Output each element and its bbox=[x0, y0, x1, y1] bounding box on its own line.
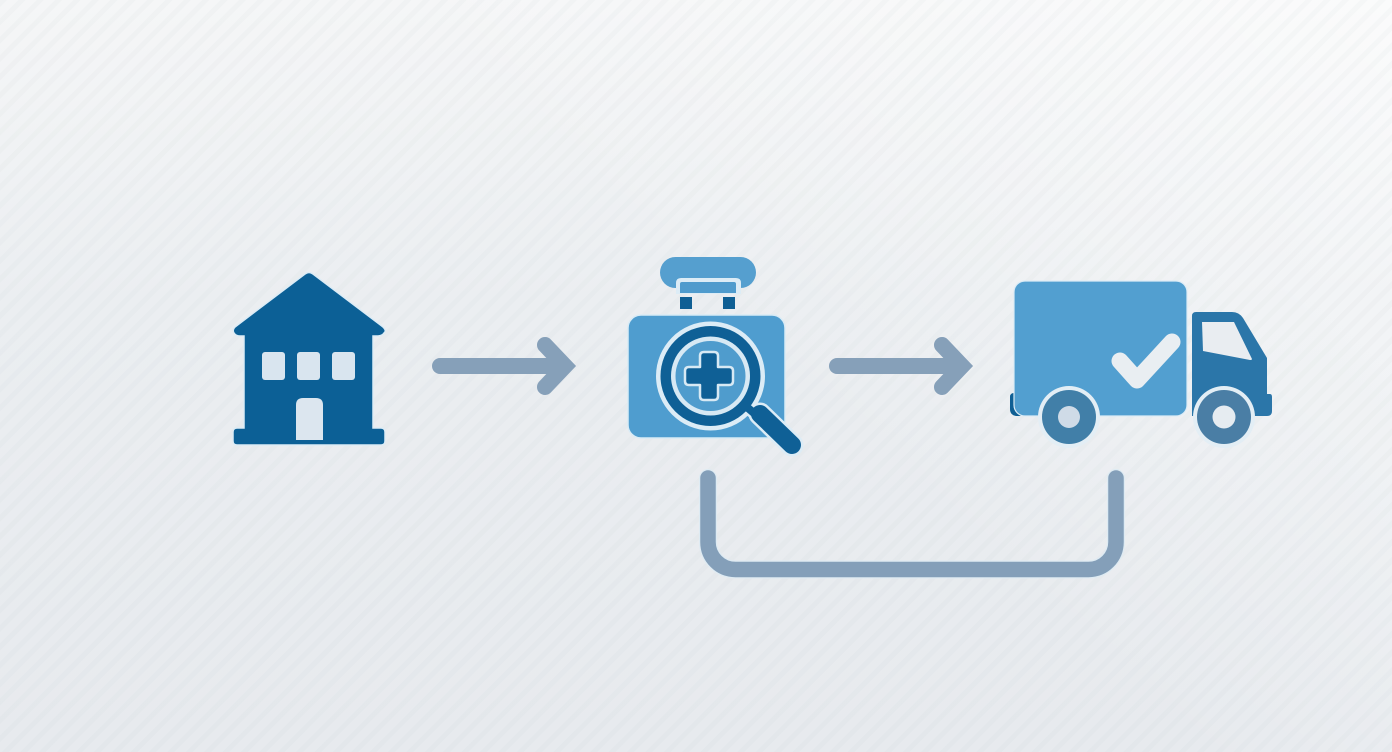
arrow: kit to truck bbox=[837, 345, 962, 387]
house door bbox=[296, 398, 323, 440]
truck cab bbox=[1192, 312, 1272, 416]
arrow: return bracket from kit to truck bbox=[708, 478, 1116, 570]
truck front wheel bbox=[1193, 386, 1255, 448]
kit handle posts bbox=[680, 297, 735, 309]
truck rear wheel bbox=[1038, 386, 1100, 448]
check mark bbox=[1120, 342, 1172, 380]
kit handle bridge bbox=[676, 278, 741, 294]
truck window bbox=[1202, 322, 1252, 360]
magnifier bbox=[656, 322, 792, 445]
arrow: house to kit bbox=[440, 345, 565, 387]
medical cross bbox=[685, 352, 733, 400]
kit body bbox=[628, 315, 785, 438]
icon: delivery truck with check mark bbox=[1010, 281, 1272, 448]
house windows bbox=[262, 352, 355, 380]
truck cargo box bbox=[1014, 281, 1187, 416]
kit top handle bbox=[660, 257, 756, 288]
truck rear bumper bbox=[1010, 393, 1025, 416]
icon: medical kit with magnifier bbox=[628, 257, 792, 445]
icon: house bbox=[233, 272, 385, 445]
